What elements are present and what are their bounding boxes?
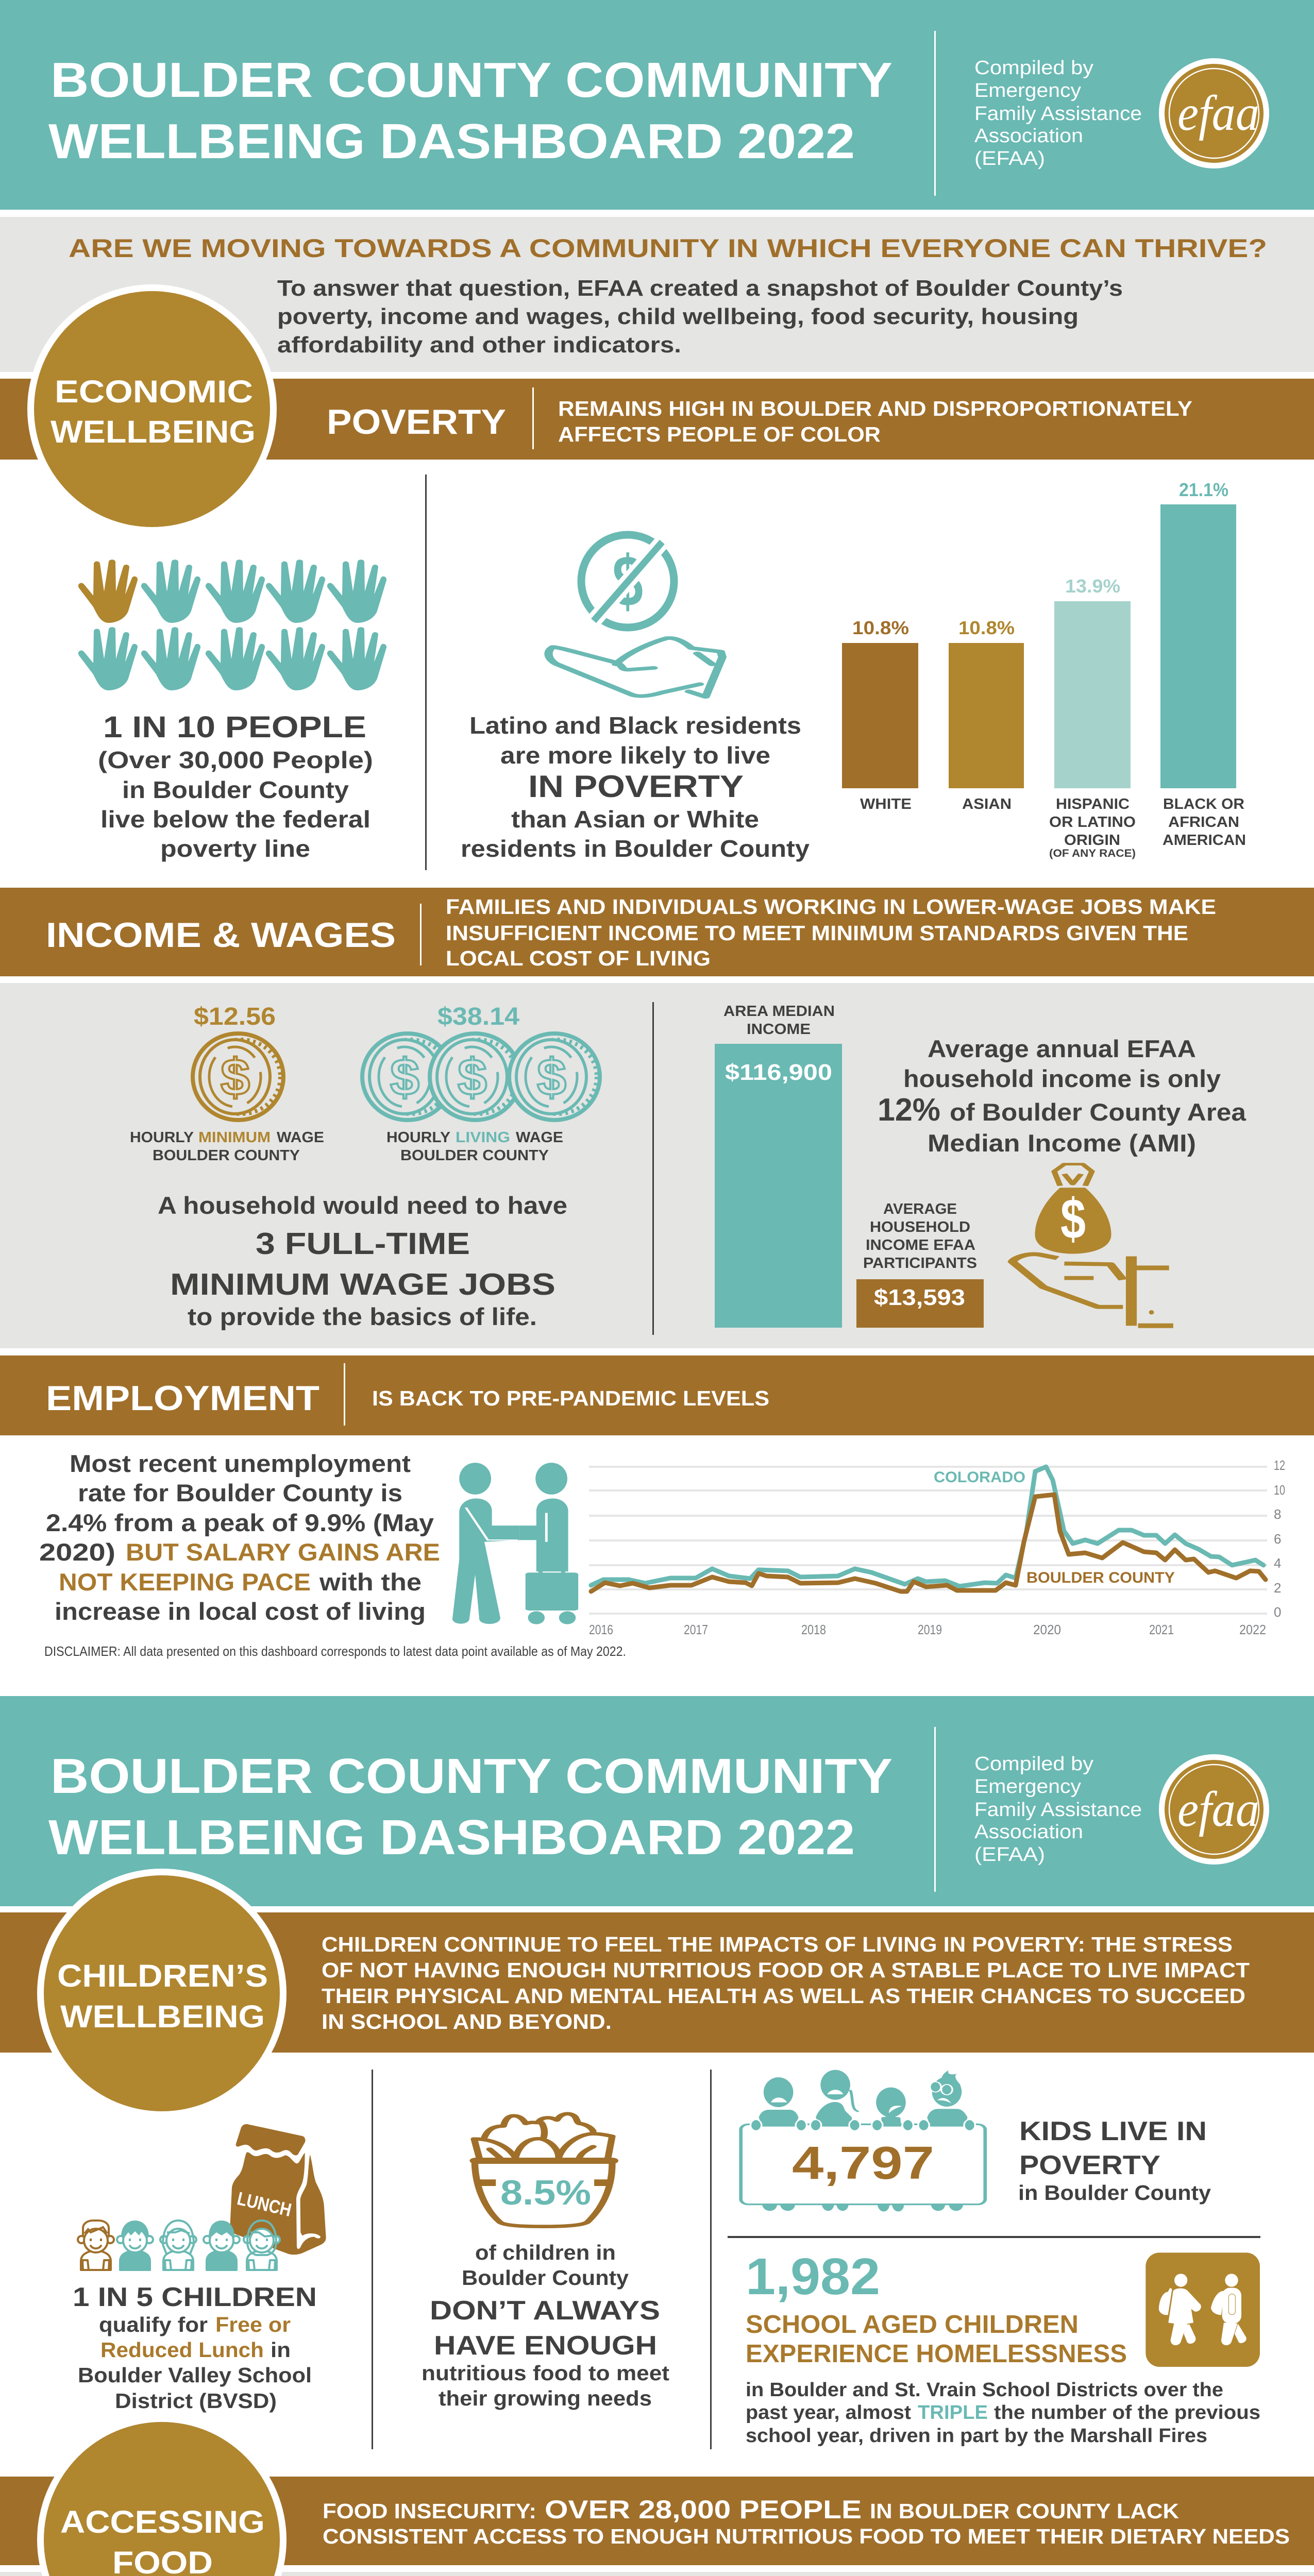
text: 1 in 5 children: Free or [215, 2313, 291, 2336]
icon: efaa logo [1159, 58, 1269, 168]
disclaimer: DISCLAIMER: All data presented on this dashboard corresponds to latest data point available as of May 2022. [44, 1643, 626, 1659]
accessing food panel background [0, 2572, 1314, 2576]
compiled by text [974, 57, 1142, 170]
panel: 1 in 10 people [78, 560, 386, 862]
heading: school aged children [746, 2311, 1127, 2368]
icon: gold coin: $ [221, 1048, 250, 1106]
bar chart: poverty by race: 10.8% [958, 617, 1015, 638]
compiled by text: (EFAA) [974, 1844, 1045, 1866]
employment band: EMPLOYMENT [46, 1379, 319, 1418]
y axis labels: 6 [1274, 1531, 1281, 1547]
text: latino and black residents: than Asian or White [511, 806, 759, 833]
x axis labels: 2018 [801, 1622, 826, 1637]
text: kids live in poverty: in Boulder County [1018, 2181, 1211, 2205]
income and wages band [0, 888, 1314, 976]
intro panel [0, 217, 1314, 372]
x axis labels [589, 1622, 1266, 1637]
icon: efaa logo: efaa [1177, 86, 1259, 141]
title: BOULDER COUNTY COMMUNITY [50, 53, 892, 108]
section badge: economic wellbeing: WELLBEING [50, 414, 256, 449]
bar chart: poverty by race: OR LATINO [1049, 814, 1136, 831]
text: 12 percent of AMI: 12% [878, 1092, 940, 1128]
text: latino and black residents [461, 712, 810, 862]
colorado line [591, 1467, 1264, 1586]
text: don't always have enough: of children in [475, 2241, 616, 2264]
text: 1 in 5 children: District (BVSD) [115, 2389, 277, 2413]
text: school districts: the number of the previous [994, 2402, 1260, 2424]
bar chart: poverty by race: 13.9% [1065, 575, 1120, 597]
living wage label: WAGE [516, 1129, 563, 1146]
text: latino and black residents: are more likely to live [500, 742, 770, 769]
living wage label: HOURLY [386, 1129, 450, 1146]
icon: ten hands [78, 560, 386, 690]
bar chart: poverty by race: WHITE [860, 796, 912, 812]
panel: wages [130, 1003, 600, 1330]
minimum wage label: WAGE [277, 1129, 324, 1146]
living wage value: $38.14 [437, 1003, 519, 1030]
boulder county line [591, 1495, 1266, 1591]
text: 1 in 5 children: Boulder Valley School [78, 2363, 312, 2387]
living wage label [386, 1129, 563, 1164]
compiled by text: Family Assistance [974, 1799, 1142, 1821]
y axis labels [1274, 1458, 1285, 1620]
minimum wage label: MINIMUM [198, 1129, 271, 1146]
bar chart: poverty by race: HISPANIC [1056, 796, 1130, 812]
section badge: children's wellbeing: CHILDREN’S [57, 1958, 268, 1993]
text: 1 in 10 people: live below the federal [100, 806, 370, 833]
compiled by text: Emergency [974, 80, 1081, 101]
icon: five children [78, 2221, 280, 2270]
text: kids live in poverty [1018, 2116, 1211, 2205]
efaa household income bar: AVERAGE [883, 1201, 957, 1217]
poverty band [0, 379, 1314, 460]
text: 1 in 5 children [73, 2282, 317, 2413]
area median income bar [715, 1003, 842, 1328]
text: school districts: TRIPLE [918, 2402, 988, 2424]
bar chart: poverty by race: AFRICAN [1168, 814, 1239, 831]
accessing food band: OVER 28,000 PEOPLE [545, 2495, 862, 2524]
accessing food band [0, 2477, 1314, 2565]
minimum wage value: $12.56 [194, 1003, 276, 1030]
efaa household income bar: INCOME EFAA [866, 1237, 975, 1253]
x axis labels: 2022 [1239, 1622, 1266, 1637]
text: school districts: school year, driven in part by the Marshall Fires [746, 2425, 1207, 2447]
icon: efaa logo: efaa [1177, 1782, 1259, 1837]
icon: salad bowl [474, 2114, 612, 2227]
header panel [0, 0, 1314, 210]
text: latino and black residents: IN POVERTY [528, 769, 744, 804]
second title [48, 1749, 892, 1865]
4,797 value: 4,797 [792, 2138, 934, 2189]
panel: area median income [715, 1003, 1246, 1328]
icon: no money hand: $ [612, 540, 643, 621]
section badge: accessing food [37, 2415, 287, 2576]
poverty band: REMAINS HIGH IN BOULDER AND DISPROPORTIONATELY [558, 397, 1192, 420]
text: three minimum wage jobs: MINIMUM WAGE JOBS [170, 1267, 555, 1301]
children band: OF NOT HAVING ENOUGH NUTRITIOUS FOOD OR A STABLE PLACE TO LIVE IMPACT [322, 1958, 1250, 1982]
minimum wage label [130, 1129, 324, 1164]
panel: free or reduced lunch [73, 2124, 326, 2413]
area median income bar: INCOME [747, 1021, 811, 1038]
text: three minimum wage jobs [158, 1192, 567, 1330]
text: 12 percent of AMI [878, 1035, 1246, 1157]
heading: question: ARE WE MOVING TOWARDS A COMMUNITY IN WHICH EVERYONE CAN THRIVE? [69, 234, 1267, 263]
icon: no money hand [548, 535, 722, 697]
area median income bar: AREA MEDIAN [723, 1003, 835, 1020]
text: don't always have enough: HAVE ENOUGH [434, 2331, 657, 2361]
x axis labels: 2019 [918, 1622, 942, 1637]
text: unemployment: with the [319, 1568, 422, 1596]
text: don't always have enough [422, 2241, 669, 2410]
8.5 percent value: 8.5% [500, 2173, 591, 2212]
second header panel [0, 1696, 1314, 1906]
minimum wage label: BOULDER COUNTY [153, 1147, 300, 1164]
icon: efaa logo [1159, 1754, 1269, 1865]
compiled by text [974, 1753, 1142, 1866]
employment band [0, 1355, 1314, 1435]
children band: IN SCHOOL AND BEYOND. [322, 2010, 612, 2033]
text: unemployment: 2.4% from a peak of 9.9% (May [46, 1509, 434, 1536]
compiled by text: Compiled by [974, 57, 1093, 79]
text: 1 in 5 children: in [271, 2338, 291, 2362]
text: unemployment: BUT SALARY GAINS ARE [126, 1538, 440, 1566]
efaa household income bar [856, 1201, 984, 1328]
text: 12 percent of AMI: household income is only [903, 1065, 1221, 1092]
children band: THEIR PHYSICAL AND MENTAL HEALTH AS WELL AS THEIR CHANCES TO SUCCEED [322, 1984, 1245, 2008]
text: kids live in poverty: POVERTY [1019, 2150, 1160, 2180]
text: 1 in 10 people: 1 IN 10 PEOPLE [103, 710, 366, 744]
text: school districts: past year, almost [746, 2402, 911, 2424]
x axis labels: 2017 [684, 1622, 708, 1637]
heading: school aged children: EXPERIENCE HOMELESSNESS [746, 2340, 1127, 2368]
y axis labels: 2 [1274, 1580, 1281, 1596]
text: 12 percent of AMI: Median Income (AMI) [928, 1129, 1196, 1157]
line chart: unemployment [589, 1458, 1285, 1637]
section badge: accessing food: ACCESSING [60, 2504, 265, 2539]
panel: poverty disparity [461, 535, 810, 862]
second title: BOULDER COUNTY COMMUNITY [50, 1749, 892, 1804]
section badge: children's wellbeing: WELLBEING [60, 1999, 265, 2034]
y axis labels: 8 [1274, 1506, 1281, 1522]
second title: WELLBEING DASHBOARD 2022 [48, 1810, 855, 1865]
accessing food band: CONSISTENT ACCESS TO ENOUGH NUTRITIOUS FOOD TO MEET THEIR DIETARY NEEDS [323, 2524, 1290, 2548]
intro text: affordability and other indicators. [277, 332, 681, 358]
x axis labels: 2020 [1033, 1622, 1061, 1637]
y axis labels: 4 [1274, 1555, 1281, 1571]
compiled by text: (EFAA) [974, 148, 1045, 170]
efaa household income bar: $13,593 [874, 1285, 965, 1310]
text: 1 in 5 children: Reduced Lunch [100, 2338, 264, 2362]
y axis labels: 12 [1274, 1458, 1285, 1473]
children band: CHILDREN CONTINUE TO FEEL THE IMPACTS OF LIVING IN POVERTY: THE STRESS [322, 1933, 1233, 1956]
text: latino and black residents: residents in Boulder County [461, 835, 810, 862]
icon: three teal coins [362, 1033, 600, 1120]
bar chart: poverty by race: BLACK OR [1163, 796, 1244, 812]
text: unemployment: Most recent unemployment [70, 1450, 411, 1477]
compiled by text: Family Assistance [974, 103, 1142, 125]
bar chart: poverty by race: 10.8% [852, 617, 909, 638]
text: school districts [746, 2379, 1260, 2447]
icon: three teal coins: $ [458, 1048, 487, 1106]
text: three minimum wage jobs: A household would need to have [158, 1192, 567, 1219]
text: 1 in 5 children: qualify for [99, 2313, 208, 2336]
text: don't always have enough: DON’T ALWAYS [430, 2296, 660, 2326]
area median income bar: $116,900 [725, 1060, 832, 1085]
icon: money bag and hand: $ [1060, 1188, 1086, 1251]
text: unemployment: 2020) [39, 1538, 115, 1566]
text: 1 in 5 children: 1 IN 5 CHILDREN [73, 2282, 317, 2312]
heading: school aged children: SCHOOL AGED CHILDREN [746, 2311, 1079, 2338]
text: three minimum wage jobs: to provide the basics of life. [188, 1303, 537, 1330]
icon: money bag and hand [1013, 1164, 1173, 1326]
panel: kids in poverty [741, 2070, 1211, 2211]
text: unemployment: rate for Boulder County is [78, 1479, 402, 1506]
x axis labels: 2021 [1149, 1622, 1174, 1637]
bar chart: poverty by race: ASIAN [962, 796, 1012, 812]
1,982 value: 1,982 [746, 2248, 880, 2306]
boulder county label: BOULDER COUNTY [1026, 1569, 1175, 1586]
icon: lunch bag [230, 2124, 326, 2255]
icon: gold coin [193, 1033, 283, 1120]
income and wages band: INSUFFICIENT INCOME TO MEET MINIMUM STANDARDS GIVEN THE [446, 921, 1188, 945]
compiled by text: Emergency [974, 1776, 1081, 1798]
poverty band: AFFECTS PEOPLE OF COLOR [558, 422, 881, 446]
employment band: IS BACK TO PRE-PANDEMIC LEVELS [372, 1386, 769, 1410]
panel: food security [422, 2114, 669, 2410]
text: three minimum wage jobs: 3 FULL-TIME [256, 1227, 470, 1261]
text: unemployment [39, 1450, 440, 1625]
panel: homelessness [746, 2248, 1260, 2447]
income and wages band: FAMILIES AND INDIVIDUALS WORKING IN LOWER-WAGE JOBS MAKE [446, 895, 1216, 919]
text: 12 percent of AMI: of Boulder County Area [950, 1098, 1246, 1126]
icon: walking children [1145, 2252, 1260, 2367]
living wage label: BOULDER COUNTY [400, 1147, 549, 1164]
text: 1 in 10 people: (Over 30,000 People) [98, 747, 373, 773]
poverty band: POVERTY [327, 402, 506, 442]
title: WELLBEING DASHBOARD 2022 [48, 114, 855, 169]
icon: three teal coins: $ [390, 1048, 419, 1106]
efaa household income bar: PARTICIPANTS [863, 1255, 977, 1272]
text: don't always have enough: their growing needs [439, 2386, 652, 2410]
income and wages band: INCOME & WAGES [46, 916, 396, 955]
text: latino and black residents: Latino and Black residents [469, 712, 801, 739]
text: unemployment: NOT KEEPING PACE [59, 1568, 311, 1596]
y axis labels: 0 [1274, 1604, 1281, 1620]
accessing food band: FOOD INSECURITY: [323, 2499, 536, 2523]
text: don't always have enough: Boulder County [462, 2266, 629, 2290]
income and wages band: LOCAL COST OF LIVING [446, 946, 711, 970]
title [48, 53, 892, 169]
intro text: poverty, income and wages, child wellbeing, food security, housing [277, 304, 1079, 329]
text: kids live in poverty: KIDS LIVE IN [1019, 2116, 1207, 2146]
bar chart: poverty by race: (OF ANY RACE) [1049, 848, 1136, 859]
text: school districts: in Boulder and St. Vrain School Districts over the [746, 2379, 1223, 2401]
intro text [277, 276, 1123, 358]
colorado label: COLORADO [934, 1469, 1025, 1486]
x axis labels: 2016 [589, 1622, 613, 1637]
text: 1 in 10 people [98, 710, 373, 862]
bar chart: poverty by race: 21.1% [1179, 479, 1228, 500]
text: don't always have enough: nutritious food to meet [422, 2361, 669, 2385]
compiled by text: Compiled by [974, 1753, 1093, 1775]
children band [0, 1912, 1314, 2053]
section badge: economic wellbeing: ECONOMIC [55, 374, 253, 409]
compiled by text: Association [974, 125, 1083, 147]
section badge: children's wellbeing [37, 1869, 287, 2118]
minimum wage label: HOURLY [130, 1129, 194, 1146]
y axis labels: 10 [1274, 1482, 1285, 1498]
intro text: To answer that question, EFAA created a snapshot of Boulder County’s [277, 276, 1123, 301]
icon: lunch bag: LUNCH [235, 2188, 294, 2221]
icon: handshake people [452, 1463, 578, 1624]
icon: children holding sign [741, 2070, 985, 2211]
icon: three teal coins: $ [537, 1048, 566, 1106]
text: 1 in 10 people: in Boulder County [122, 776, 349, 803]
bar chart: poverty by race: ORIGIN [1064, 832, 1120, 849]
efaa household income bar: HOUSEHOLD [870, 1219, 970, 1235]
text: 12 percent of AMI: Average annual EFAA [928, 1035, 1196, 1062]
living wage label: LIVING [456, 1129, 510, 1146]
text: unemployment: increase in local cost of living [55, 1598, 426, 1625]
income panel background [0, 983, 1314, 1348]
bar chart: poverty by race: AMERICAN [1163, 832, 1246, 849]
bar chart: poverty by race [842, 479, 1246, 859]
compiled by text: Association [974, 1821, 1083, 1843]
accessing food band: IN BOULDER COUNTY LACK [870, 2499, 1179, 2523]
text: 1 in 10 people: poverty line [160, 835, 310, 862]
section badge: economic wellbeing [27, 284, 277, 534]
